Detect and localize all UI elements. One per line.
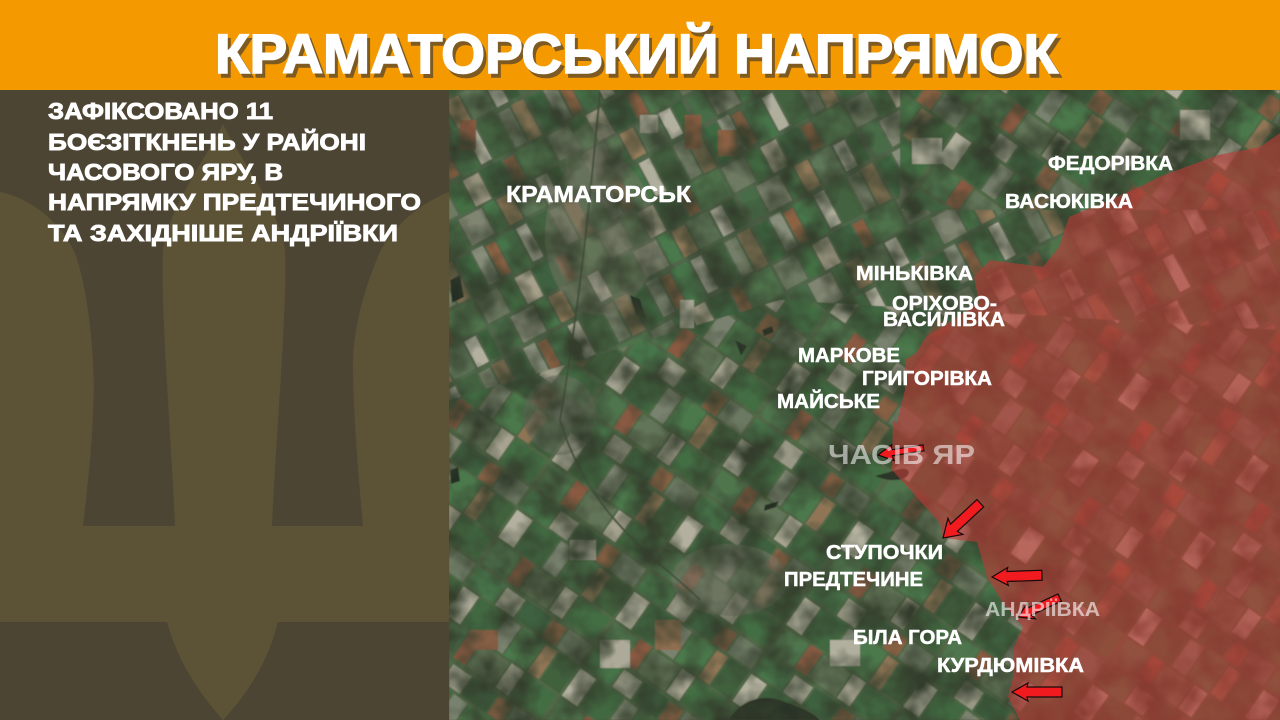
map label: Часів Яр: ЧАСІВ ЯР bbox=[828, 439, 975, 470]
map label: Курдюмівка: КУРДЮМІВКА bbox=[937, 655, 1084, 677]
arrow: Часів Яр bbox=[877, 444, 925, 462]
olive colour wash bbox=[449, 90, 1280, 720]
map label: Біла Гора: БІЛА ГОРА bbox=[853, 627, 962, 649]
arrow: Курдюмівка bbox=[1012, 683, 1062, 701]
arrow: Андріївка bbox=[1017, 593, 1062, 620]
note text: ЗАФІКСОВАНО 11 bbox=[48, 98, 273, 124]
header bar bbox=[0, 0, 1280, 90]
map label: Андріївка: АНДРІЇВКА bbox=[985, 598, 1100, 621]
left panel background bbox=[0, 90, 449, 720]
map label: Оріхово-Василівка: ВАСИЛІВКА bbox=[883, 309, 1005, 331]
title: КРАМАТОРСЬКИЙ НАПРЯМОК bbox=[215, 22, 1059, 85]
map label: Міньківка: МІНЬКІВКА bbox=[856, 263, 973, 285]
map label: Краматорськ: КРАМАТОРСЬК bbox=[506, 181, 692, 207]
arrow: north of Ступочки bbox=[942, 498, 984, 539]
title: КРАМАТОРСЬКИЙ НАПРЯМОК bbox=[218, 26, 1062, 89]
map label: Предтечине: ПРЕДТЕЧИНЕ bbox=[784, 569, 923, 591]
arrow: towards Предтечине bbox=[992, 566, 1042, 586]
note text bbox=[48, 98, 421, 246]
occupied territory overlay bbox=[892, 133, 1280, 720]
map label: Оріхово-Василівка bbox=[884, 296, 1005, 326]
trident emblem bbox=[0, 124, 449, 720]
map label: Маркове: МАРКОВЕ bbox=[798, 345, 900, 367]
note text: БОЄЗІТКНЕНЬ У РАЙОНІ bbox=[48, 128, 366, 155]
map label: Григорівка: ГРИГОРІВКА bbox=[862, 368, 992, 390]
hand placed features bbox=[450, 92, 1210, 720]
note text: ТА ЗАХІДНІШЕ АНДРІЇВКИ bbox=[48, 220, 398, 246]
map label: Васюківка: ВАСЮКІВКА bbox=[1005, 191, 1133, 213]
map label: Федорівка: ФЕДОРІВКА bbox=[1048, 153, 1173, 175]
map label: Майське: МАЙСЬКЕ bbox=[777, 389, 880, 413]
note text: ЧАСОВОГО ЯРУ, В bbox=[48, 159, 283, 185]
terrain mottling bbox=[449, 90, 1280, 720]
map terrain and fields bbox=[449, 90, 1280, 720]
map label: Ступочки: СТУПОЧКИ bbox=[826, 542, 943, 564]
map label: Оріхово-Василівка: ОРІХОВО- bbox=[892, 293, 997, 315]
note text: НАПРЯМКУ ПРЕДТЕЧИНОГО bbox=[48, 189, 421, 215]
satellite map bbox=[449, 90, 1280, 720]
